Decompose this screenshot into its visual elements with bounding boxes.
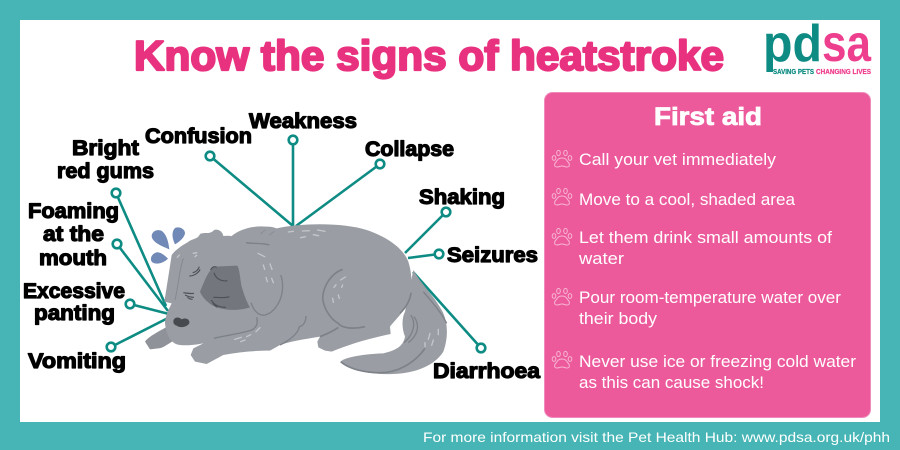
- step: no ice warning: Never use ice or freezing cold water: [579, 353, 857, 371]
- nose: [173, 317, 189, 327]
- label: Foaming at the mouth: Foaming: [28, 200, 119, 223]
- step: no ice warning: as this can cause shock!: [579, 374, 764, 392]
- logo: pdsa: sa: [822, 15, 872, 73]
- label: Confusion: Confusion: [145, 125, 252, 148]
- illustration: sleeping grey dog: [145, 224, 447, 374]
- label: Excessive panting: panting: [34, 302, 115, 325]
- step: small drinks: Let them drink small amounts of: [579, 229, 832, 247]
- label: Vomiting: Vomiting: [28, 350, 126, 373]
- logo: pdsa: [763, 15, 872, 76]
- label: Bright red gums: Bright: [72, 137, 139, 160]
- dark eye patch: [200, 266, 250, 310]
- label: Weakness: Weakness: [249, 110, 357, 133]
- step: no ice warning: [552, 351, 857, 392]
- label: Foaming at the mouth: at the: [43, 223, 104, 246]
- logo: pdsa: SAVING PETS: [773, 67, 814, 76]
- panel heading: First aid: [654, 103, 762, 131]
- dog front: far paw, head, face: [145, 226, 283, 349]
- label: Shaking: Shaking: [419, 186, 505, 209]
- front leg outline: [214, 317, 257, 338]
- label: Collapse: Collapse: [365, 138, 454, 161]
- label: Excessive panting: Excessive: [23, 280, 125, 303]
- step: pour water: Pour room-temperature water over: [579, 289, 842, 307]
- left ear line: [175, 258, 183, 300]
- step: call vet: Call your vet immediately: [579, 151, 777, 169]
- step: move to shade: Move to a cool, shaded area: [579, 191, 796, 209]
- far paw: [145, 326, 175, 349]
- fold behind head: [232, 226, 273, 244]
- step: pour water: their body: [579, 310, 658, 328]
- logo: pdsa: CHANGING LIVES: [816, 67, 871, 76]
- label: Diarrhoea: Diarrhoea: [433, 360, 540, 383]
- fur highlights: [177, 253, 273, 342]
- sweat drops: [151, 227, 185, 264]
- connector lines and markers: [107, 136, 485, 352]
- title: Know the signs of heatstroke: [134, 32, 724, 79]
- label: Excessive panting: [23, 280, 125, 325]
- label: Bright red gums: red gums: [57, 160, 154, 183]
- label: Foaming at the mouth: mouth: [39, 247, 107, 270]
- label: Seizures: Seizures: [447, 244, 538, 267]
- dog rear: tail and body: [191, 224, 447, 374]
- step: small drinks: [552, 228, 832, 268]
- label: Foaming at the mouth: [28, 200, 119, 270]
- head: [164, 230, 280, 345]
- step: pour water: [552, 288, 842, 328]
- closed eyes and brows: [183, 267, 229, 307]
- step: small drinks: water: [578, 250, 625, 268]
- footer link text: For more information visit the Pet Health Hub: www.pdsa.org.uk/phh: [423, 429, 890, 445]
- label: Bright red gums: [57, 137, 154, 183]
- right ear: [238, 242, 283, 315]
- panel: first aid: [544, 92, 870, 418]
- logo: pdsa: pd: [763, 15, 822, 73]
